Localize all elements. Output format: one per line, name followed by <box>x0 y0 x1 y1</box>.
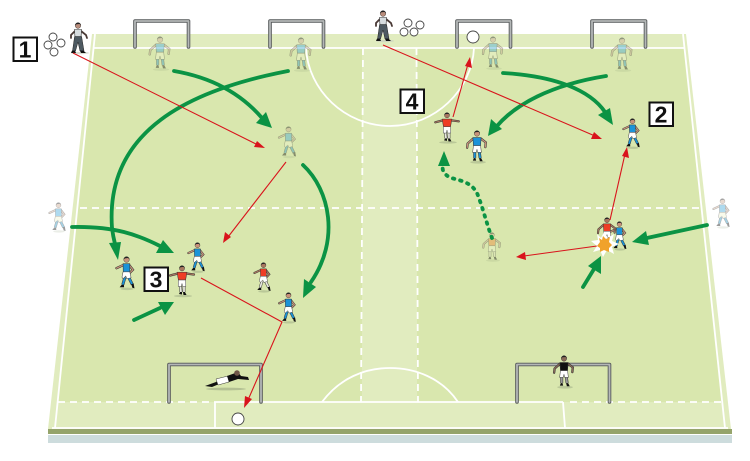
faded players <box>49 37 730 233</box>
tackle starburst <box>591 232 619 257</box>
ball below bottom goal <box>232 413 244 425</box>
referee right with balls <box>376 11 424 42</box>
pitch markings <box>52 34 728 428</box>
base strip <box>48 429 732 443</box>
label 2 <box>650 102 673 128</box>
bottom goals <box>169 364 610 402</box>
goalkeeper diving <box>205 370 249 390</box>
label 1 <box>14 36 37 62</box>
green dotted dribble arrow <box>438 151 492 238</box>
red players <box>170 112 615 297</box>
goalkeeper standing <box>554 356 573 389</box>
top goals <box>135 21 646 47</box>
referee left with balls <box>44 23 89 56</box>
ball in top goal <box>467 31 479 43</box>
green run arrows <box>72 71 707 320</box>
label 4: 4 <box>406 88 419 114</box>
red pass arrows <box>73 45 629 408</box>
label 2: 2 <box>655 102 667 128</box>
label 3: 3 <box>150 266 162 292</box>
label 1: 1 <box>19 36 32 62</box>
blue players <box>116 118 640 324</box>
faded orange player <box>483 232 500 262</box>
label 4 <box>400 88 424 114</box>
pitch surface <box>48 34 731 429</box>
label 3 <box>144 266 168 292</box>
